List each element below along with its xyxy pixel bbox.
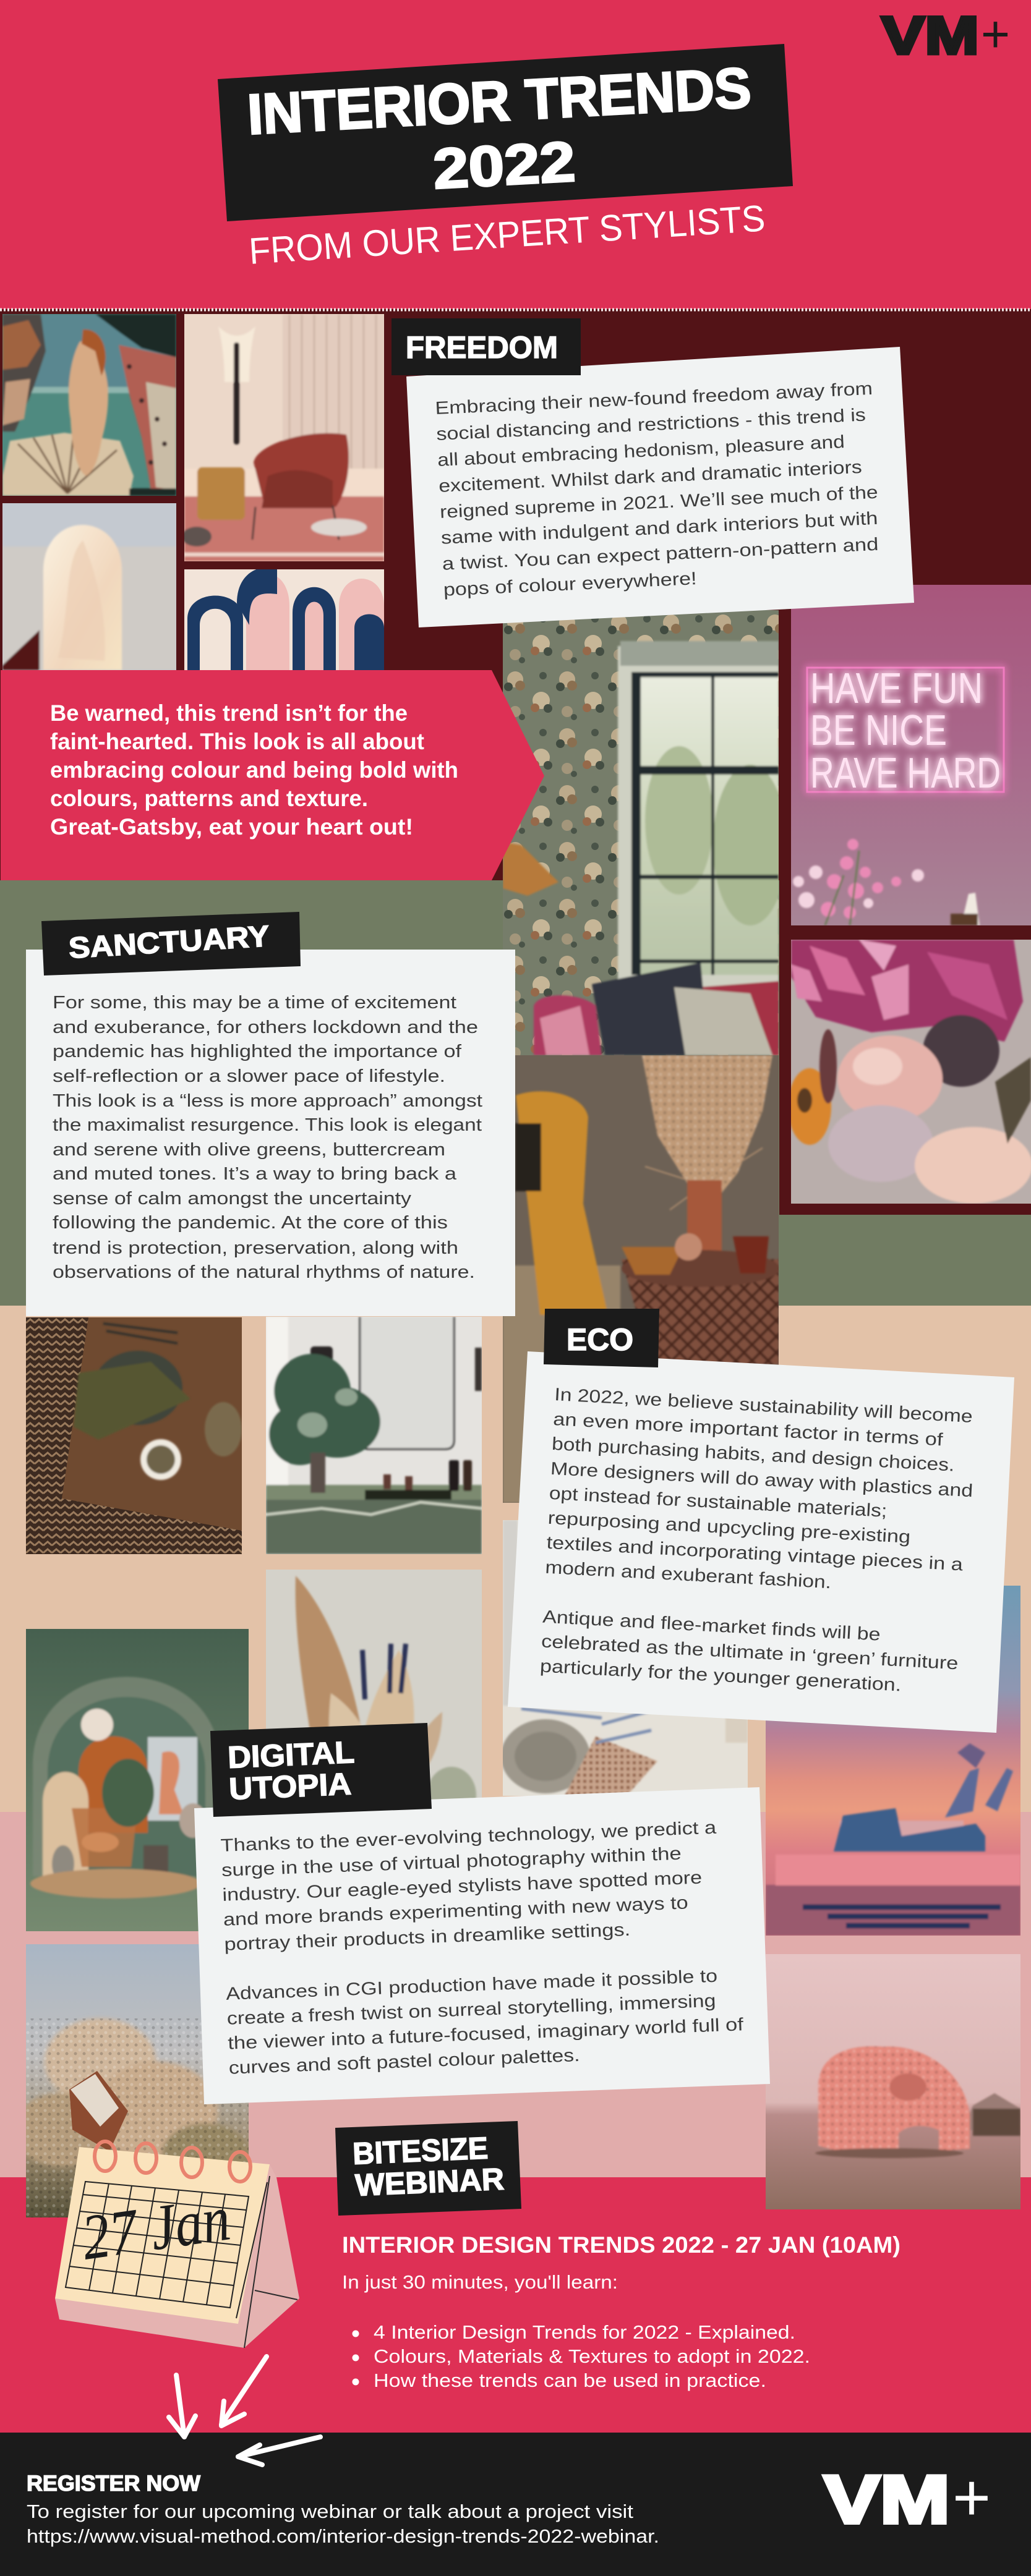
card: eco text: textiles and incorporating vintage pieces in a	[546, 1533, 964, 1575]
heading: eco: ECO	[567, 1322, 633, 1357]
card: digital utopia text: the viewer into a future-focused, imaginary world full of	[228, 2015, 745, 2054]
register now text: To register for our upcoming webinar or talk about a project visit	[27, 2501, 633, 2522]
card: digital utopia text: Thanks to the ever-evolving technology, we predict a	[220, 1818, 717, 1856]
callout: be warned: Be warned, this trend isn’t for the	[50, 700, 408, 726]
card: sanctuary text: and serene with olive greens, buttercream	[53, 1140, 445, 1160]
card: freedom text: same with indulgent and dark interiors but with	[440, 509, 878, 548]
webinar details: Colours, Materials & Textures to adopt in 2022.	[374, 2345, 810, 2367]
card: freedom text: Embracing their new-found freedom away from	[435, 379, 873, 419]
photo: linen and pewter plate	[503, 1520, 748, 1796]
header logo	[881, 5, 1010, 66]
heading: eco	[544, 1309, 659, 1367]
card: sanctuary text: sense of calm amongst the uncertainty	[53, 1189, 412, 1209]
register now text: https://www.visual-method.com/interior-design-trends-2022-webinar.	[27, 2525, 659, 2547]
photo: Venus painting	[2, 314, 176, 496]
webinar details: INTERIOR DESIGN TRENDS 2022 - 27 JAN (10AM)	[342, 2232, 901, 2258]
photo: bedroom pampas	[503, 1055, 779, 1503]
card: freedom text: pops of colour everywhere!	[443, 569, 697, 600]
photo: red armchair room	[184, 314, 384, 561]
card: eco text: celebrated as the ultimate in ‘green’ furniture	[541, 1631, 959, 1673]
heading: freedom: FREEDOM	[406, 330, 558, 365]
photo: floating bed at sunset	[766, 1586, 1020, 1936]
panel: sanctuary	[26, 912, 515, 1316]
callout: be warned	[1, 670, 544, 880]
card: digital utopia text: create a fresh twist on surreal storytelling, immersing	[226, 1991, 716, 2029]
callout: be warned: embracing colour and being bold with	[50, 757, 458, 783]
card: freedom text: all about embracing hedonism, pleasure and	[437, 432, 845, 470]
card: sanctuary text: and exuberance, for others lockdown and the	[53, 1018, 478, 1037]
heading: digital utopia: UTOPIA	[228, 1766, 352, 1806]
card: eco text: modern and exuberant fashion.	[545, 1558, 832, 1592]
panel: window room photo	[503, 610, 779, 1055]
register now text	[27, 2472, 659, 2547]
card: eco text: More designers will do away with plastics and	[550, 1459, 973, 1501]
photo: dried flower field	[26, 1944, 249, 2217]
card: sanctuary text: observations of the natural rhythms of nature.	[53, 1262, 475, 1282]
card: digital utopia text: and more brands experimenting with new ways to	[223, 1893, 688, 1930]
heading: bitesize webinar: BITESIZE	[352, 2130, 489, 2171]
card: eco text: both purchasing habits, and design choices.	[551, 1434, 955, 1476]
webinar details: In just 30 minutes, you'll learn:	[342, 2271, 618, 2293]
card: freedom text: excitement. Whilst dark and dramatic interiors	[438, 457, 862, 496]
card: digital utopia text: surge in the use of virtual photography within the	[221, 1844, 682, 1881]
card: freedom text: reigned supreme in 2021. We’ll see much of the	[439, 483, 878, 522]
neon sign	[807, 664, 1004, 797]
card: digital utopia text: portray their products in dreamlike settings.	[224, 1920, 631, 1955]
neon sign: BE NICE	[810, 706, 947, 754]
photo: glass dome diorama	[26, 1629, 249, 1931]
card: sanctuary text: pandemic has highlighted the importance of	[53, 1042, 462, 1061]
photo: art deco wallpaper	[184, 569, 384, 670]
footer logo: +	[952, 2460, 991, 2535]
photo: rug and wooden table	[26, 1317, 242, 1554]
photo: marble lamp	[2, 503, 176, 670]
card: eco text: opt instead for sustainable materials;	[549, 1484, 888, 1521]
heading: bitesize webinar: WEBINAR	[354, 2162, 505, 2203]
card: digital utopia text: curves and soft pastel colour palettes.	[228, 2046, 580, 2078]
heading: sanctuary	[41, 912, 301, 976]
webinar details: How these trends can be used in practice.	[374, 2370, 766, 2391]
card: sanctuary text: and muted tones. It’s a way to bring back a	[53, 1164, 457, 1184]
card: digital utopia text: Advances in CGI production have made it possible to	[226, 1966, 718, 2004]
card: freedom text: a twist. You can expect pattern-on-pattern and	[442, 535, 879, 574]
footer logo: VM	[824, 2462, 950, 2538]
card: digital utopia text: industry. Our eagle-eyed stylists have spotted more	[222, 1868, 703, 1905]
card: eco text: Antique and flee-market finds will be	[542, 1607, 881, 1645]
card: sanctuary text: For some, this may be a time of excitement	[53, 993, 456, 1013]
card: sanctuary text: trend is protection, preservation, along with	[53, 1238, 458, 1258]
icon: desk calendar	[55, 2141, 299, 2348]
heading: freedom	[391, 318, 581, 375]
card: eco text: an even more important factor in terms of	[552, 1409, 944, 1450]
card: sanctuary text: This look is a “less is more approach” amongst	[53, 1091, 482, 1111]
footer logo	[824, 2460, 991, 2538]
header logo: +	[981, 5, 1010, 63]
card: eco text	[508, 1351, 1014, 1733]
icon: desk calendar: 27 Jan	[77, 2182, 234, 2274]
callout: be warned: faint-hearted. This look is all about	[50, 729, 424, 754]
card: freedom text	[406, 347, 914, 627]
webinar details: 4 Interior Design Trends for 2022 - Explained.	[374, 2321, 795, 2343]
photo: pink textured armchair	[766, 1954, 1020, 2209]
photo: marble bathroom	[266, 1317, 482, 1554]
heading: bitesize webinar	[335, 2121, 521, 2216]
card: freedom text: social distancing and restrictions - this trend is	[436, 405, 866, 444]
title block: INTERIOR TRENDS	[246, 56, 753, 147]
card: sanctuary text: the maximalist resurgence. This look is elegant	[53, 1115, 482, 1135]
photo: neon sign wall	[791, 585, 1031, 925]
card: digital utopia text	[194, 1787, 770, 2104]
card: eco text: particularly for the younger generation.	[539, 1656, 902, 1695]
photo: pampas arrangement	[266, 1570, 482, 1800]
title block: 2022	[432, 130, 577, 201]
webinar details	[342, 2232, 901, 2391]
arrows pointing to register	[169, 2357, 320, 2465]
subtitle: FROM OUR EXPERT STYLISTS	[248, 197, 766, 272]
register now text: REGISTER NOW	[27, 2472, 200, 2496]
heading: digital utopia: DIGITAL	[227, 1735, 355, 1775]
header logo: VM	[881, 6, 979, 66]
heading: digital utopia	[210, 1723, 432, 1817]
panel: eco	[508, 1309, 1014, 1733]
card: eco text: repurposing and upcycling pre-existing	[547, 1508, 911, 1547]
card: eco text: In 2022, we believe sustainability will become	[554, 1385, 973, 1427]
neon sign: HAVE FUN	[810, 664, 983, 712]
panel: digital utopia	[194, 1723, 770, 2104]
callout: be warned: Great-Gatsby, eat your heart out!	[50, 814, 413, 840]
callout: be warned: colours, patterns and texture.	[50, 786, 368, 811]
heading: sanctuary: SANCTUARY	[67, 920, 270, 965]
card: sanctuary text	[26, 950, 515, 1316]
photo: dark floral	[791, 940, 1031, 1204]
panel: freedom	[391, 318, 914, 627]
card: sanctuary text: self-reflection or a slower pace of lifestyle.	[53, 1066, 445, 1086]
card: sanctuary text: following the pandemic. At the core of this	[53, 1213, 448, 1233]
title block	[218, 44, 793, 221]
